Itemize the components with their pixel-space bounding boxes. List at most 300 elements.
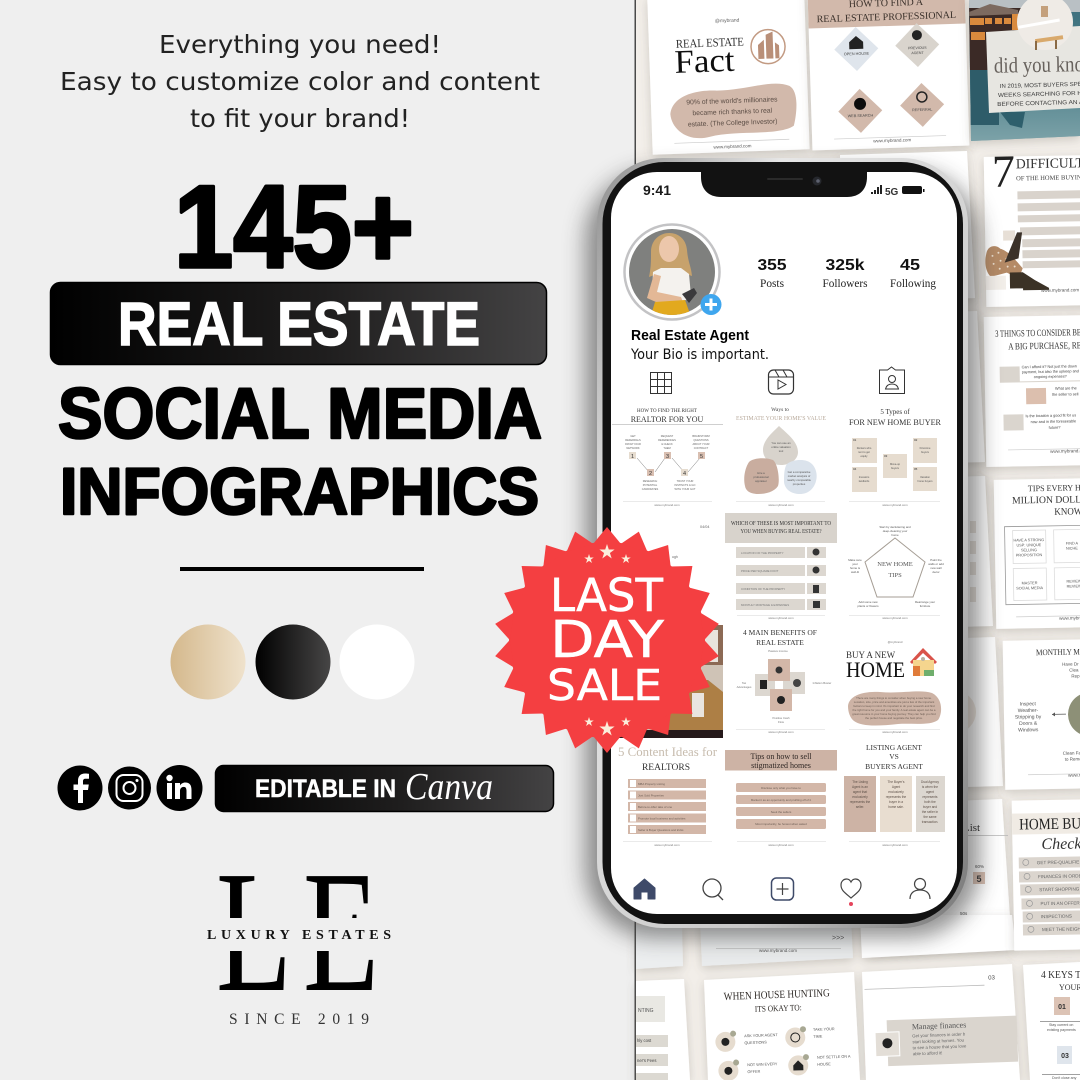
card: 3 things to consider: payment, but also the upkeep and	[1022, 369, 1079, 374]
card: did you know photo: IN 2019, MOST BUYERS SPE	[1000, 82, 1080, 90]
brand logo: E	[303, 835, 379, 1028]
editable in canva banner	[216, 766, 554, 812]
post: types of new home buyer: home buyers	[918, 479, 933, 483]
card: 3 things to consider: Can I afford it? Not just the down	[1022, 364, 1077, 369]
post: find the right realtor: BRAINSTORM	[692, 434, 710, 438]
post: types of new home buyer: Investors	[859, 475, 870, 479]
card: 4 keys: Don't close any	[1052, 1076, 1077, 1080]
post: estimate home value: properties	[793, 482, 806, 486]
sliver details	[716, 521, 1008, 953]
post: listing agent vs buyer's agent: Dual Agency	[921, 780, 939, 784]
post: new home tips pentagon: furniture	[920, 604, 931, 608]
icon: facebook	[58, 766, 102, 810]
add story button	[700, 294, 722, 315]
phone shadow	[585, 170, 980, 938]
card: monthly maintenance: Doors &	[1019, 721, 1038, 727]
post: buy a new home: @mybrand	[888, 640, 903, 644]
post: listing agent vs buyer's agent: represents the	[886, 795, 906, 799]
post: find the right realtor: TRUST YOUR	[677, 479, 694, 483]
post: types of new home buyer: 04	[853, 467, 857, 471]
post: four main benefits: 4 MAIN BENEFITS OF	[743, 628, 817, 637]
post: types of new home buyer	[849, 408, 942, 507]
card: real estate fact: www.mybrand.com	[713, 143, 752, 150]
post: types of new home buyer: 02	[914, 438, 918, 442]
card: 4 keys: Stay current on	[1049, 1023, 1073, 1027]
card: 3 things to consider: Is the location a good fit for us	[1025, 413, 1076, 418]
sliver details: 60%	[975, 864, 984, 869]
brand logo: LUXURY ESTATES	[207, 928, 391, 943]
brand logo: SINCE 2019	[229, 1011, 369, 1028]
post: find the right realtor: 2	[649, 471, 652, 477]
post: estimate home value: Hire a	[757, 471, 765, 475]
card: 3 things to consider: ongoing expenses?	[1034, 375, 1067, 379]
sliver details: >>>	[832, 935, 844, 942]
post: tips on stigmatized homes: Seek the sellers	[771, 810, 792, 814]
post: new home tips pentagon: www.mybrand.com	[882, 616, 908, 620]
card: monthly maintenance: Weather-	[1018, 708, 1039, 714]
notch	[701, 171, 867, 197]
post: listing agent vs buyer's agent: www.mybrand.com	[882, 843, 908, 847]
post: listing agent vs buyer's agent: agent that	[853, 790, 867, 794]
post: types of new home buyer: First-time	[920, 446, 931, 450]
card: 7 difficult	[983, 144, 1080, 307]
post: listing agent vs buyer's agent: home sale.	[888, 805, 904, 809]
post: new home tips pentagon: home	[891, 533, 899, 537]
post: four main benefits: Flow	[778, 720, 785, 724]
card: 4 keys: 03	[1061, 1053, 1069, 1060]
card: 3 things to consider: What are the	[1055, 386, 1077, 391]
post: find the right realtor: 4	[683, 471, 686, 477]
card: did you know photo: WEEKS SEARCHING FOR H	[998, 91, 1080, 99]
post: find the right realtor: HOW TO FIND THE RIGHT	[637, 409, 697, 414]
card: 7 difficult: www.mybrand.com	[1041, 287, 1079, 293]
post: buy a new home: HOME	[846, 657, 905, 682]
badge starburst	[493, 527, 721, 753]
post: find the right realtor: POTENTIAL	[643, 483, 658, 487]
tilted template cards background	[636, 0, 1080, 1080]
post: left column checklist with photo: 04/04	[700, 525, 710, 529]
profile bio	[630, 328, 769, 363]
card: when house hunting: ITS OKAY TO:	[755, 1002, 802, 1014]
card: manage finances: able to afford it!	[913, 1050, 942, 1056]
card: tips every million dollar: HAVE A STRONG	[1013, 538, 1044, 543]
post: listing agent vs buyer's agent: Agent	[892, 785, 900, 789]
phone body	[597, 158, 968, 928]
post: new home tips pentagon: your	[852, 562, 858, 566]
card: home buying checklist: INSPECTIONS	[1041, 914, 1072, 919]
post: listing agent vs buyer's agent: is when the	[922, 785, 938, 789]
card: how to find a professional: REFERRAL	[912, 108, 932, 112]
post: estimate home value: ESTIMATE YOUR HOME'S VALUE	[736, 416, 826, 422]
big number 145+: 145+	[174, 161, 414, 292]
post: types of new home buyer: 5 Types of	[880, 408, 910, 416]
post: most important when buying: PRICE PER SQUARE FOOT	[741, 569, 779, 573]
post: listing agent vs buyer's agent: seller.	[856, 805, 864, 809]
post: left column checklist with photo: ugh	[672, 555, 678, 559]
post: find the right realtor: CANDIDATES	[642, 487, 659, 491]
card: monthly maintenance: Have Dr	[1062, 661, 1079, 667]
post: estimate home value: online valuation	[771, 445, 791, 449]
badge text: DAY	[550, 611, 665, 670]
icon: instagram	[108, 766, 151, 810]
card: monthly maintenance	[1003, 639, 1080, 790]
post: most important when buying: www.mybrand.com	[768, 616, 794, 620]
card: manage finances: Manage finances	[912, 1020, 966, 1031]
post: content ideas for realtors: 5 Content Ideas for	[618, 744, 718, 759]
card: when house hunting: HOUSE	[817, 1062, 831, 1067]
post: find the right realtor: INSTINCTS & GO	[675, 483, 695, 487]
card: home buying checklist	[1012, 799, 1080, 951]
post: most important when buying: CONDITION OF THE PROPERTY	[741, 587, 785, 591]
sliver details: www.mybrand.com	[759, 948, 797, 953]
post: new home tips pentagon	[848, 525, 944, 620]
post: find the right realtor: REALTOR FOR YOU	[631, 415, 704, 424]
post: types of new home buyer: buyers	[921, 450, 930, 454]
brand logo	[175, 835, 415, 1028]
tab icons	[650, 367, 904, 394]
post: find the right realtor: www.mybrand.com	[654, 503, 680, 507]
post: content ideas for realtors: Promote local business and activities	[638, 816, 686, 820]
heading infographics: INFOGRAPHICS	[60, 454, 539, 528]
card: monthly maintenance: Inspect	[1020, 701, 1037, 708]
heading social media: SOCIAL MEDIA	[58, 375, 542, 454]
card: manage finances: 03	[988, 975, 996, 982]
card: manage finances: start looking at homes. You	[912, 1037, 965, 1044]
card: when house hunting: TIME	[813, 1035, 823, 1039]
badge text: SALE	[547, 661, 662, 711]
card: when house hunting	[714, 987, 852, 1080]
post: find the right realtor: NETWORK	[626, 446, 640, 450]
profile stats: 45	[900, 257, 920, 274]
profile stats: 325k	[826, 257, 865, 274]
card: home buying checklist: MEET THE NEIGH	[1042, 926, 1080, 932]
status bar	[643, 182, 924, 198]
bottom row hidden cards	[636, 915, 1080, 1080]
post: find the right realtor: FROM YOUR	[625, 442, 641, 446]
post: listing agent vs buyer's agent: transaction.	[922, 820, 938, 824]
post: four main benefits: Tax	[742, 681, 747, 685]
card: 3 things to consider: the seller to sell	[1052, 392, 1079, 397]
card: real estate fact	[647, 0, 810, 155]
card: home buying checklist: GET PRE-QUALIFIE	[1037, 859, 1079, 865]
status bar: 5G	[885, 187, 899, 198]
post: find the right realtor: 3	[666, 454, 669, 460]
post: buy a new home: There are many things to consider when buying a new home.	[856, 696, 932, 700]
post: new home tips pentagon: plants or flowers	[857, 604, 879, 608]
card: monthly maintenance: Rep	[1071, 673, 1080, 679]
post: listing agent vs buyer's agent: LISTING AGENT	[866, 743, 922, 752]
card: manage finances: to see a house that you love	[913, 1043, 967, 1050]
card: how to find a professional: OPEN HOUSE	[844, 52, 870, 56]
intro text: Everything you need!	[159, 30, 441, 59]
card: rental bits: NTING	[638, 1008, 654, 1014]
post: estimate home value: tool	[779, 449, 784, 453]
post: four main benefits: Advantages	[737, 685, 752, 689]
post: tips on stigmatized homes: stigmatized homes	[751, 761, 811, 770]
card: tips every million dollar: SELLING	[1021, 548, 1037, 552]
card: tips every million dollar: USP: UNIQUE	[1016, 543, 1042, 547]
sliver details: 50s	[960, 911, 968, 916]
post: types of new home buyer: landlords	[859, 479, 870, 483]
post: listing agent vs buyer's agent: buyer and	[923, 805, 937, 809]
card: real estate fact: REAL ESTATE	[676, 34, 744, 51]
card: tips every million dollar: FIND A	[1066, 541, 1079, 546]
post: find the right realtor: QUESTIONS	[693, 438, 709, 442]
profile stats: 355	[758, 257, 787, 274]
post: find the right realtor: WITH YOUR GUT	[674, 487, 696, 491]
post: listing agent vs buyer's agent: agent	[926, 790, 934, 794]
post: new home tips pentagon: Add some new	[858, 600, 878, 604]
post: most important when buying: WHICH OF THESE IS MOST IMPORTANT TO	[731, 521, 832, 527]
post: find the right realtor: REFERENCES	[658, 438, 676, 442]
card: when house hunting: QUESTIONS	[744, 1040, 767, 1045]
card: tips every million dollar: MASTER	[1022, 581, 1038, 585]
card: 4 keys: existing payments	[1047, 1028, 1076, 1032]
post: find the right realtor: REFERRALS	[625, 438, 641, 442]
intro text	[60, 30, 540, 133]
post: find the right realtor: CONTRACT	[694, 446, 709, 450]
post: buy a new home: great resource in your home buying journey. They can help you find	[852, 712, 936, 716]
card: when house hunting: WHEN HOUSE HUNTING	[724, 987, 830, 1003]
post: listing agent vs buyer's agent: The Listing	[852, 780, 868, 784]
post: find the right realtor: 5	[700, 454, 703, 460]
post: estimate home value: You can use an	[771, 441, 791, 445]
card: home buying checklist: PUT IN AN OFFER	[1040, 900, 1080, 906]
post: new home tips pentagon: Start by decluttering and	[879, 525, 911, 529]
post: types of new home buyer: FOR NEW HOME BUYER	[849, 418, 942, 427]
post: most important when buying	[725, 513, 837, 620]
card: how to find a professional: www.mybrand.com	[873, 137, 912, 143]
card: rental bits: ner's Fees	[637, 1058, 656, 1063]
post: listing agent vs buyer's agent: represents the	[850, 800, 870, 804]
post: new home tips pentagon: Paint the	[930, 558, 942, 562]
card: when house hunting: NOT WIN EVERY	[747, 1062, 778, 1067]
card: manage finances	[864, 975, 1018, 1067]
card: tips every million dollar: PROPOSITION	[1016, 553, 1043, 558]
post: new home tips pentagon: walls or add	[928, 562, 944, 566]
phone mockup	[597, 158, 968, 928]
post: buy a new home: the right home for you and your family. A real estate agent can be a	[853, 708, 936, 712]
card: did you know photo	[969, 0, 1080, 141]
post: new home tips pentagon: Rearrange your	[915, 600, 935, 604]
post: new home tips pentagon: deep-cleaning your	[883, 529, 907, 533]
card: how to find a professional: AGENT	[911, 51, 925, 55]
card: how to find a professional: REAL ESTATE PROFESSIONAL	[817, 10, 956, 25]
post: find the right realtor: ABOUT YOUR	[692, 442, 710, 446]
post: most important when buying: MONTHLY MORTAGE & EXPENSES	[741, 603, 789, 607]
post: buy a new home: BUY A NEW	[846, 650, 896, 660]
middle column hidden cards	[840, 151, 1012, 953]
editable in canva banner: Canva	[405, 766, 493, 808]
post: content ideas for realtors: REALTORS	[642, 763, 690, 773]
post: buy a new home: the perfect house and negotiate the best price.	[865, 716, 923, 720]
post: buy a new home: www.mybrand.com	[882, 730, 908, 734]
post: content ideas for realtors	[618, 744, 718, 847]
card: home buying checklist: START SHOPPING	[1039, 886, 1080, 892]
profile stats: Posts	[760, 276, 784, 290]
post: estimate home value: Ways to	[771, 407, 789, 413]
post: content ideas for realtors: Just Sold Properties	[638, 794, 664, 798]
post: buy a new home: Location, size, price and amenities are just a few of the important	[854, 700, 934, 704]
card: did you know photo: BEFORE CONTACTING AN A	[997, 100, 1080, 108]
card: how to find a professional: WEB SEARCH	[848, 113, 874, 118]
profile bio: Your Bio is important.	[630, 347, 769, 363]
post: types of new home buyer: equity	[861, 454, 868, 458]
post: find the right realtor: & CHECK	[661, 442, 673, 446]
post: four main benefits	[736, 628, 831, 734]
post: tips on stigmatized homes: Tips on how to sell	[750, 752, 812, 761]
badge text: LAST	[550, 569, 663, 622]
post: buy a new home: factors to keep in mind. It's important to do your research and find	[853, 704, 935, 708]
divider rule	[180, 567, 424, 571]
post: types of new home buyer: 03	[884, 454, 888, 458]
badge stars	[584, 544, 631, 735]
post: tips on stigmatized homes	[725, 750, 837, 847]
post: listing agent vs buyer's agent: the same	[923, 815, 937, 819]
card: 3 things to consider	[984, 315, 1080, 467]
bottom navigation	[634, 878, 930, 906]
post: left column checklist with photo	[614, 525, 723, 738]
post: content ideas for realtors: MBA Property Listing	[638, 782, 665, 786]
sliver details: List	[963, 822, 980, 834]
card: when house hunting: ASK YOUR AGENT	[744, 1033, 778, 1038]
card: when house hunting: OFFER	[747, 1070, 761, 1074]
editable in canva banner: EDITABLE IN	[255, 775, 396, 803]
post: types of new home buyer: www.mybrand.com	[882, 503, 908, 507]
post: listing agent vs buyer's agent: BUYER'S AGENT	[865, 762, 923, 771]
post: four main benefits: REAL ESTATE	[756, 638, 804, 647]
card: when house hunting: TAKE YOUR	[813, 1027, 835, 1032]
last day sale badge	[493, 527, 721, 753]
post: find the right realtor: RESEARCH	[643, 479, 657, 483]
post: new home tips pentagon: well-lit	[851, 570, 859, 574]
post: find the right realtor: REQUEST	[661, 434, 674, 438]
sliver details: 5	[976, 874, 982, 884]
post: tips on stigmatized homes: Disclose only what you have to	[761, 786, 801, 790]
post: most important when buying: YOU WHEN BUYING REAL ESTATE?	[740, 529, 822, 535]
real estate banner: REAL ESTATE	[118, 290, 480, 358]
post: content ideas for realtors: Seller & Buyer Questions and tricks	[638, 828, 684, 832]
card: tips every million dollar: NICHE	[1066, 546, 1078, 551]
card: how to find a professional	[808, 0, 969, 150]
post: estimate home value: appraiser	[755, 479, 767, 483]
post: listing agent vs buyer's agent: both the	[924, 800, 936, 804]
card: 7 difficult: 7	[992, 145, 1015, 197]
post: listing agent vs buyer's agent: exclusively	[888, 790, 904, 794]
post: new home tips pentagon: Make sure	[848, 558, 862, 562]
intro text: to fit your brand!	[190, 104, 410, 133]
post: find the right realtor: 1	[631, 454, 634, 460]
post: listing agent vs buyer's agent: buyer in a	[889, 800, 903, 804]
post: find the right realtor: GET	[630, 434, 636, 438]
post: most important when buying: LOCATION OF THE PROPERTY	[741, 551, 784, 555]
right background panel	[636, 0, 1080, 1080]
profile bio: Real Estate Agent	[631, 328, 749, 344]
card: 4 keys	[1040, 970, 1080, 1080]
post: types of new home buyer: buyers	[891, 466, 900, 470]
icon: linkedin	[156, 765, 202, 811]
post: types of new home buyer: Renters who	[857, 446, 872, 450]
post: content ideas for realtors: Before-to-After take of one	[638, 805, 672, 809]
post: listing agent vs buyer's agent: the seller in	[922, 810, 938, 814]
post: estimate home value: www.mybrand.com	[768, 503, 794, 507]
card: 3 things to consider: now and in the foreseeable	[1031, 419, 1076, 424]
card: 3 things to consider: future?	[1049, 426, 1061, 430]
post: listing agent vs buyer's agent: exclusively	[852, 795, 868, 799]
post: estimate home value: Get a comparative	[788, 470, 811, 474]
colour swatches	[170, 624, 414, 700]
post: four main benefits: Positive Cash	[772, 716, 790, 720]
post: tips on stigmatized homes: Market it as an opportunity and profiting off of it	[751, 798, 811, 802]
post: tips on stigmatized homes: Most importantly, be honest when asked	[755, 822, 807, 826]
profile stats	[758, 257, 936, 290]
card: rental bits: hly cost	[637, 1038, 652, 1043]
post: listing agent vs buyer's agent: represents	[922, 795, 938, 799]
card: rental bits	[636, 996, 668, 1080]
card: 4 keys: 01	[1058, 1004, 1066, 1011]
post: types of new home buyer: 05	[914, 467, 918, 471]
card: real estate fact: became rich thanks to real	[692, 108, 773, 117]
post: estimate home value: market analysis of	[788, 474, 810, 478]
post: types of new home buyer: Vacation	[920, 475, 931, 479]
post: new home tips pentagon: NEW HOME	[877, 561, 913, 568]
status bar: 9:41	[643, 182, 671, 198]
vertical divider	[634, 0, 636, 1080]
card: tips every million dollar	[994, 478, 1080, 629]
post: buy a new home	[846, 640, 941, 734]
card: real estate fact: @mybrand	[715, 18, 740, 24]
post: listing agent vs buyer's agent: VS	[889, 752, 899, 761]
card: monthly maintenance: Windows	[1018, 727, 1039, 734]
post: estimate home value: nearby comparable	[787, 478, 811, 482]
card: real estate fact: Fact	[674, 43, 735, 81]
post: content ideas for realtors: www.mybrand.com	[654, 843, 680, 847]
brand logo: L	[216, 835, 292, 1028]
post: find the right realtor	[612, 409, 723, 507]
left background panel	[0, 0, 636, 1080]
post: four main benefits: Inflation Buster	[813, 681, 831, 685]
post: new home tips pentagon: home is	[850, 566, 861, 570]
post: estimate home value: professional	[753, 475, 769, 479]
post: types of new home buyer: 01	[853, 438, 857, 442]
card: real estate fact: 90% of the world's millionaires	[686, 96, 778, 107]
profile stats: Following	[890, 276, 936, 290]
card: monthly maintenance: Stripping by	[1015, 714, 1042, 721]
card: tips every million dollar: SOCIAL MEDIA	[1016, 586, 1044, 591]
post: listing agent vs buyer's agent	[844, 743, 945, 847]
post: find the right realtor: THEM	[663, 446, 671, 450]
profile avatar	[624, 224, 720, 322]
post: four main benefits: www.mybrand.com	[768, 730, 794, 734]
card: monthly maintenance: Clea	[1069, 667, 1079, 673]
post: new home tips pentagon: new wall	[930, 566, 942, 570]
post: estimate home value	[736, 407, 826, 507]
post: types of new home buyer: Move-up	[890, 462, 901, 466]
post: new home tips pentagon: TIPS	[888, 572, 902, 579]
post: types of new home buyer: rent to get	[858, 450, 870, 454]
badge text	[547, 569, 665, 711]
card: manage finances: Get your finances in order b	[912, 1031, 966, 1038]
post: listing agent vs buyer's agent: Agent is an	[852, 785, 868, 789]
post: new home tips pentagon: decor	[932, 570, 940, 574]
intro text: Easy to customize color and content	[60, 67, 540, 96]
real estate banner	[50, 282, 546, 364]
post: tips on stigmatized homes: www.mybrand.com	[768, 843, 794, 847]
post: listing agent vs buyer's agent: The Buyer's	[888, 780, 905, 784]
card: how to find a professional: PREVIOUS	[908, 46, 927, 50]
card: when house hunting: NOT SETTLE ON A	[817, 1055, 851, 1060]
profile stats: Followers	[822, 276, 868, 290]
